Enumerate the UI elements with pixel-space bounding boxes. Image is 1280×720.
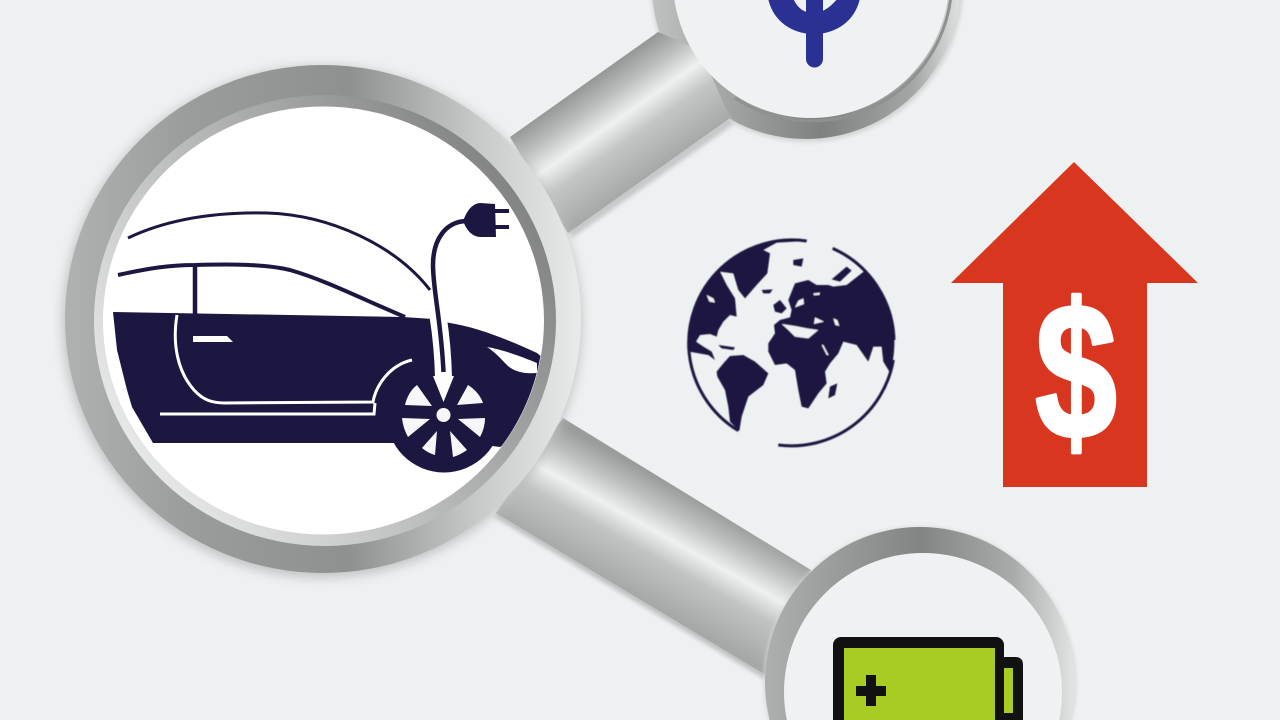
icon: blue symbol [768,0,860,68]
dollar sign: $ [1035,265,1117,480]
bottom circle metal ring [764,527,1076,720]
front wheel [394,385,492,472]
headlight [487,347,537,373]
icon: electric car and plug [113,203,560,472]
top circle metal ring [651,0,963,142]
node: top circle face with blue icon [673,0,951,121]
car roof outlines [118,213,430,317]
globe outline arcs [689,240,894,446]
icon: world globe [689,240,894,446]
plug [463,203,509,237]
node: bottom circle with battery icon [764,527,1076,720]
continents [689,240,894,431]
connector: lower metal pipe [494,418,811,680]
magnifier metal ring [63,65,581,577]
icon: red up arrow with dollar sign [951,162,1198,487]
charging cable [433,221,466,402]
top circle face [673,0,951,121]
main magnifier circle with electric car [63,65,581,577]
icon: green battery [833,637,1023,720]
connector: upper metal pipe [510,32,734,238]
inland seas [707,293,839,355]
car side lines and door [160,315,412,414]
door handle [193,336,233,342]
car body [113,312,560,447]
